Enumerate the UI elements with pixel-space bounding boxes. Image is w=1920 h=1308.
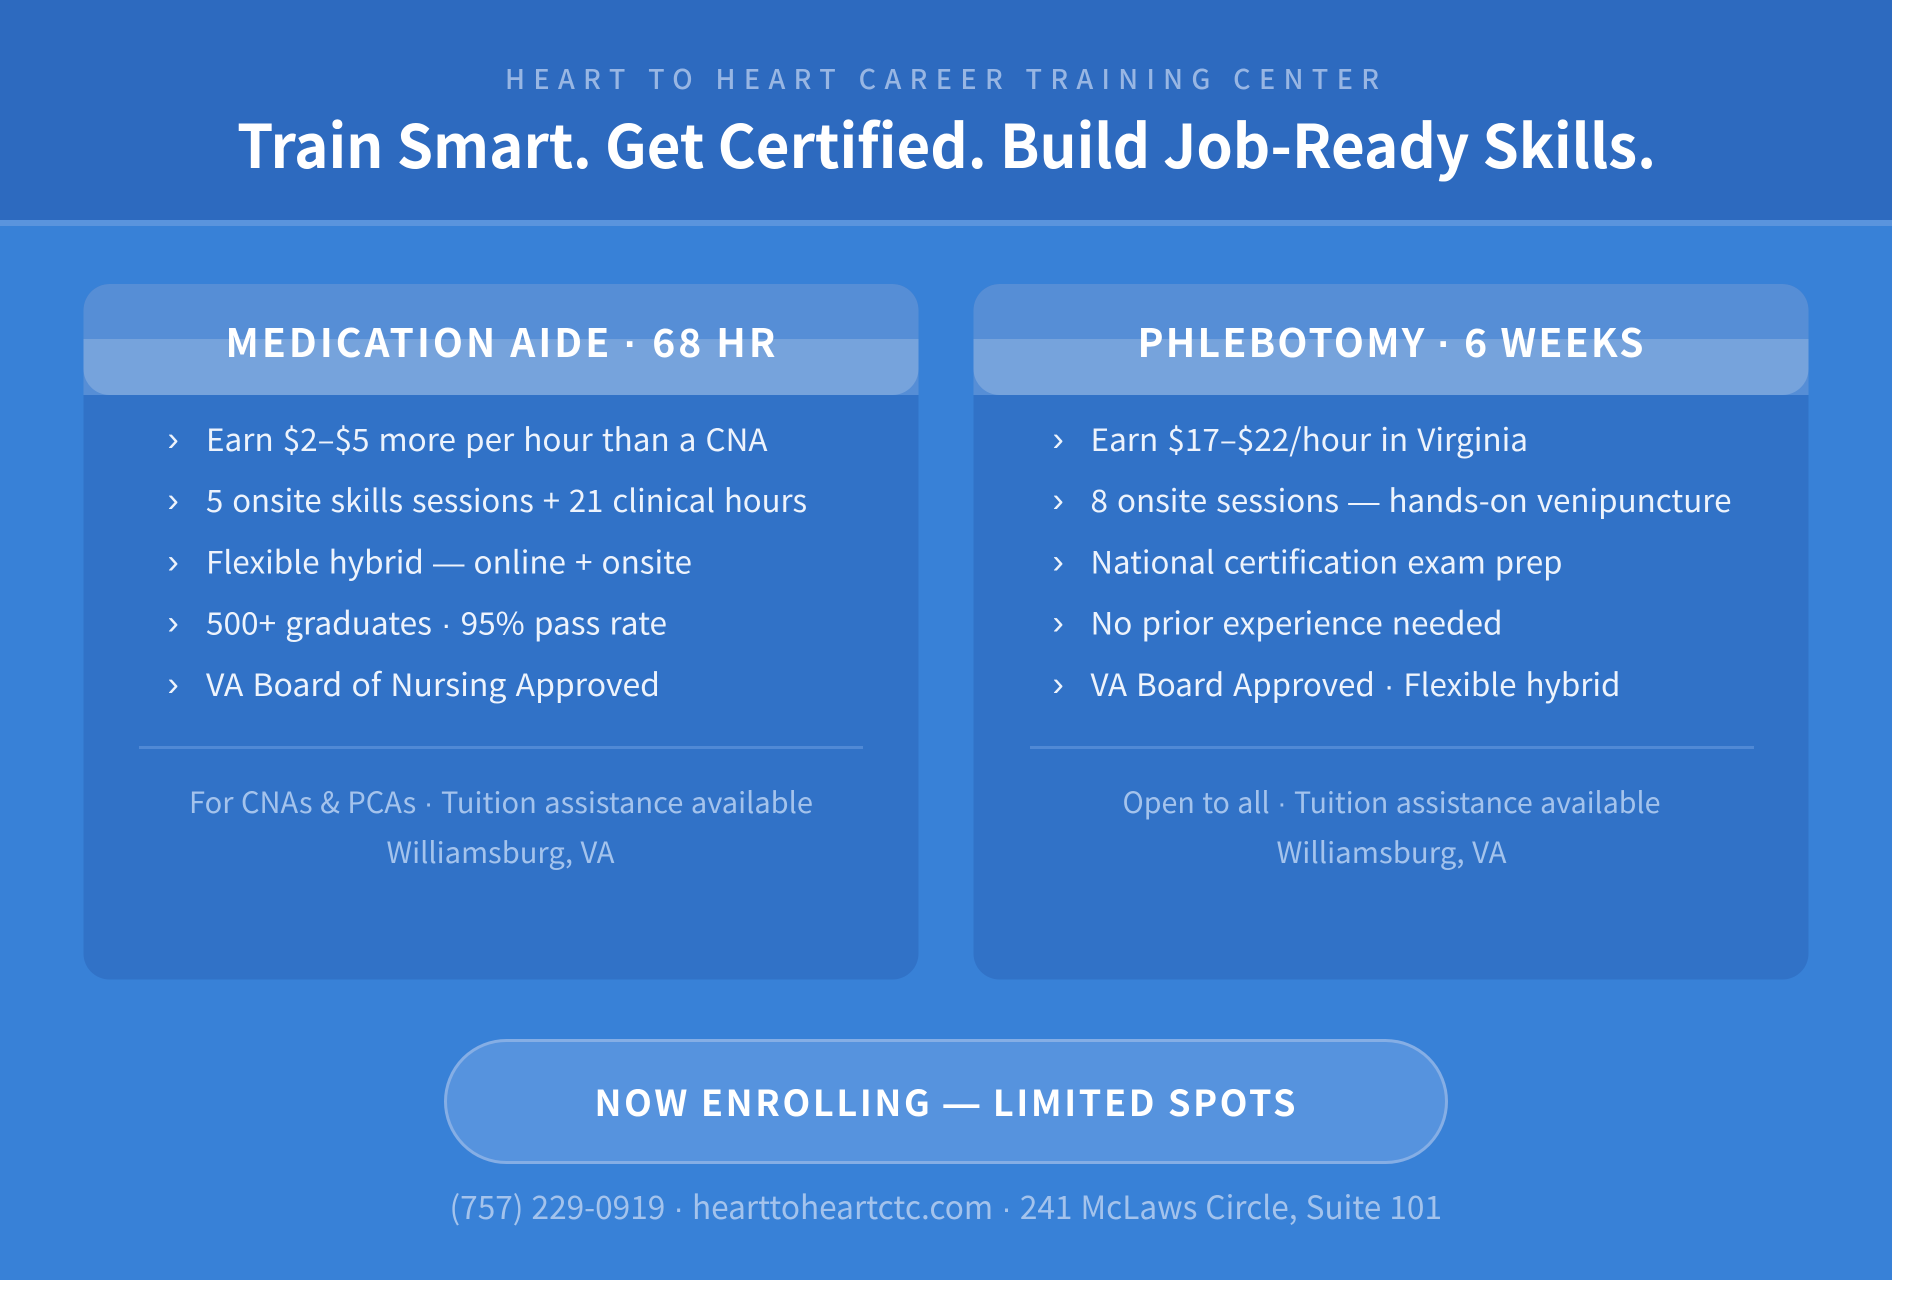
- benefits list: medication aide: Earn $2–$5 more per hour than a CNA: [206, 415, 768, 460]
- benefits list: medication aide: [168, 415, 807, 705]
- benefits list: medication aide: ›: [168, 604, 179, 642]
- benefits list: phlebotomy: ›: [1052, 482, 1064, 520]
- heading: medication aide: MEDICATION AIDE · 68 HR: [226, 313, 776, 369]
- note: phlebotomy: Open to all · Tuition assistance available: [1122, 780, 1660, 822]
- header band: [0, 0, 1892, 226]
- benefits list: medication aide: ›: [168, 482, 179, 520]
- benefits list: medication aide: ›: [168, 420, 179, 458]
- benefits list: medication aide: 5 onsite skills sessions + 21 clinical hours: [206, 476, 807, 521]
- benefits list: medication aide: Flexible hybrid — online + onsite: [206, 538, 692, 582]
- main title: Train Smart. Get Certified. Build Job-Ready Skills.: [237, 99, 1656, 186]
- panel: phlebotomy: [974, 284, 1808, 980]
- panel: medication aide: [84, 284, 918, 980]
- call to action pill: [446, 1040, 1446, 1162]
- heading: phlebotomy: PHLEBOTOMY · 6 WEEKS: [1138, 313, 1644, 369]
- call to action pill: NOW ENROLLING — LIMITED SPOTS: [594, 1075, 1296, 1127]
- organisation name: HEART TO HEART CAREER TRAINING CENTER: [505, 58, 1379, 97]
- contact line: (757) 229-0919 · hearttoheartctc.com · 241 McLaws Circle, Suite 101: [450, 1183, 1442, 1229]
- benefits list: phlebotomy: ›: [1052, 666, 1064, 704]
- benefits list: phlebotomy: No prior experience needed: [1090, 599, 1502, 644]
- benefits list: phlebotomy: [1052, 415, 1732, 705]
- benefits list: phlebotomy: ›: [1052, 604, 1064, 642]
- note: phlebotomy: [1122, 780, 1660, 872]
- benefits list: phlebotomy: National certification exam prep: [1090, 538, 1562, 582]
- benefits list: medication aide: 500+ graduates · 95% pass rate: [206, 599, 667, 644]
- note: medication aide: Williamsburg, VA: [386, 830, 615, 872]
- benefits list: phlebotomy: ›: [1052, 543, 1064, 581]
- benefits list: phlebotomy: VA Board Approved · Flexible hybrid: [1090, 660, 1620, 705]
- benefits list: medication aide: ›: [168, 543, 179, 581]
- benefits list: medication aide: ›: [168, 666, 179, 704]
- benefits list: medication aide: VA Board of Nursing Approved: [206, 660, 660, 705]
- note: phlebotomy: Williamsburg, VA: [1276, 830, 1507, 872]
- benefits list: phlebotomy: ›: [1052, 420, 1064, 458]
- note: medication aide: [189, 780, 813, 872]
- note: medication aide: For CNAs & PCAs · Tuition assistance available: [189, 780, 813, 822]
- benefits list: phlebotomy: 8 onsite sessions — hands-on venipuncture: [1090, 476, 1732, 521]
- benefits list: phlebotomy: Earn $17–$22/hour in Virginia: [1090, 415, 1528, 460]
